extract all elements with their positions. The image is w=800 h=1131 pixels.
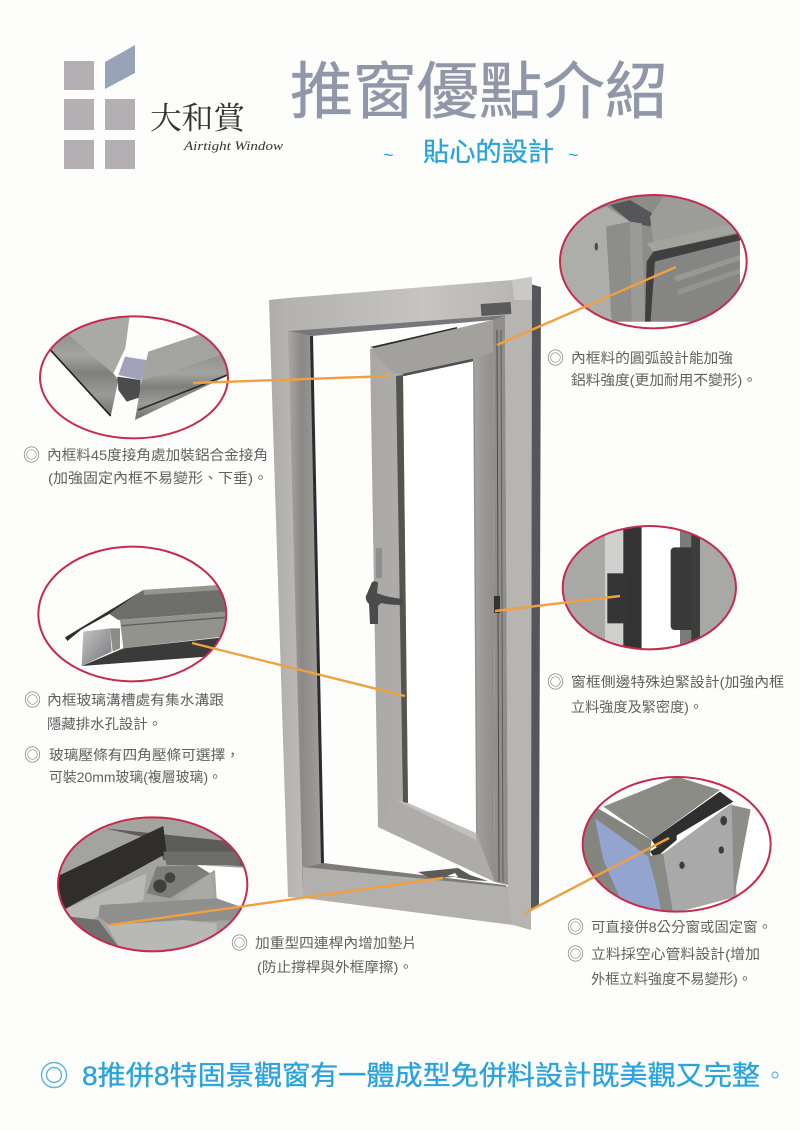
subtitle: ~ bbox=[568, 145, 579, 165]
stay arm bbox=[418, 868, 488, 881]
leader lines bbox=[110, 267, 676, 925]
text: 45 degree joint: (加強固定內框不易變形、下垂)。 bbox=[48, 470, 268, 486]
frame outer left band bbox=[269, 298, 303, 898]
back strip of frame bbox=[529, 284, 541, 910]
handle bbox=[366, 581, 403, 624]
text: rounded profile: 內框料的圓弧設計能加強 bbox=[571, 350, 733, 366]
right arm bbox=[142, 333, 225, 380]
subtitle bbox=[383, 137, 579, 167]
text: rounded profile: ◎ bbox=[547, 349, 564, 368]
sash glass bbox=[403, 360, 476, 833]
text: 45 degree joint bbox=[23, 446, 268, 486]
text: drainage and glass bead: ◎ bbox=[24, 746, 41, 765]
text: 45 degree joint: 內框料45度接角處加裝鋁合金接角 bbox=[47, 447, 268, 463]
text: rounded profile bbox=[547, 349, 757, 388]
sash top shadow bbox=[370, 327, 457, 349]
text: four-bar hinge bbox=[231, 934, 417, 975]
sash bbox=[370, 320, 495, 882]
sash bottom band bbox=[378, 800, 495, 882]
subtitle: 貼心的設計 bbox=[423, 137, 554, 167]
callout: compression seal bbox=[562, 525, 738, 650]
text: rounded profile: 鋁料強度(更加耐用不變形)。 bbox=[571, 372, 757, 388]
text: compression seal: ◎ bbox=[547, 673, 564, 692]
subtitle: ~ bbox=[383, 145, 394, 165]
text: drainage and glass bead: 可裝20mm玻璃(複層玻璃)。 bbox=[49, 769, 222, 785]
connector bbox=[118, 357, 147, 380]
text: drainage and glass bead: 隱藏排水孔設計。 bbox=[47, 716, 162, 732]
text: drainage and glass bead bbox=[24, 691, 240, 785]
text: 45 degree joint: ◎ bbox=[23, 446, 40, 465]
logo squares bbox=[64, 45, 135, 169]
callout: rounded profile bbox=[558, 193, 750, 328]
text: compression seal: 立料強度及緊密度)。 bbox=[571, 699, 703, 715]
window photo bbox=[269, 277, 541, 930]
frame left reveal bbox=[288, 331, 323, 898]
callout: hollow tube mullion bbox=[582, 775, 772, 913]
text: four-bar hinge: (防止撐桿與外框摩擦)。 bbox=[257, 959, 413, 975]
frame right band bbox=[505, 277, 532, 930]
text: four-bar hinge: 加重型四連桿內增加墊片 bbox=[255, 935, 417, 951]
banner text: 8推併8特固景觀窗有一體成型免併料設計既美觀又完整 bbox=[82, 1061, 760, 1091]
frame left dark edge bbox=[310, 336, 324, 864]
frame top bar bbox=[288, 280, 512, 331]
callout: drainage channel bbox=[38, 547, 230, 681]
text: mullion: ◎ bbox=[567, 945, 584, 964]
callout: corner joint bbox=[40, 313, 229, 438]
bottom banner bbox=[42, 1061, 778, 1091]
callout: four-bar hinge bbox=[57, 817, 250, 953]
logo tagline: Airtight Window bbox=[183, 138, 283, 153]
frame bottom bar bbox=[303, 863, 513, 925]
keeper bbox=[494, 596, 500, 613]
text: compression seal: 窗框側邊特殊迫緊設計(加強內框 bbox=[571, 674, 784, 690]
text: drainage and glass bead: 玻璃壓條有四角壓條可選擇， bbox=[49, 747, 240, 763]
logo name: 大和賞 bbox=[150, 101, 247, 136]
text: mullion: 立料採空心管料設計(增加 bbox=[591, 946, 760, 962]
left arm bbox=[69, 318, 130, 374]
banner end mark bbox=[772, 1072, 778, 1078]
sash inner dark edge bbox=[396, 375, 408, 803]
text: four-bar hinge: ◎ bbox=[231, 934, 248, 953]
handle plate bbox=[376, 548, 382, 578]
text: mullion bbox=[567, 918, 772, 987]
hinge strip bbox=[493, 315, 508, 885]
text: drainage and glass bead: ◎ bbox=[24, 691, 41, 710]
text: mullion: 外框立料強度不易變形)。 bbox=[591, 971, 752, 987]
text: compression seal bbox=[547, 673, 784, 715]
text: mullion: 可直接併8公分窗或固定窗。 bbox=[591, 919, 772, 935]
text: drainage and glass bead: 內框玻璃溝槽處有集水溝跟 bbox=[47, 692, 224, 708]
sash top band bbox=[370, 320, 493, 375]
logo: Airtight Window bbox=[64, 45, 283, 169]
frame label plate bbox=[481, 302, 511, 316]
title: 推窗優點介紹 bbox=[290, 58, 668, 127]
banner bullet bbox=[42, 1062, 66, 1088]
text: mullion: ◎ bbox=[567, 918, 584, 937]
